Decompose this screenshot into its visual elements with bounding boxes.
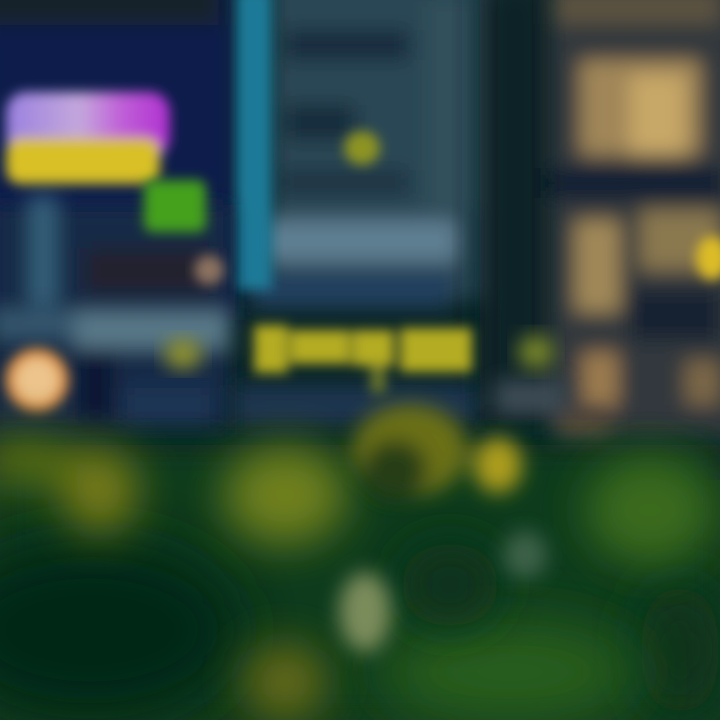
icon: teal column xyxy=(236,0,272,290)
icon: billboard yellow band xyxy=(6,138,160,184)
panel: foreground foliage xyxy=(0,445,720,720)
icon: dark bush xyxy=(400,543,500,627)
panel: lower central building xyxy=(235,380,610,442)
panel: lower left storefronts xyxy=(0,195,230,430)
panel: left night sky xyxy=(0,0,235,320)
chart: neon billboard xyxy=(6,92,170,184)
panel: right warm building xyxy=(550,0,720,440)
icon: yellow-green window on building xyxy=(344,131,380,165)
icon: billboard upper band xyxy=(6,92,170,158)
icon: small yellow light xyxy=(165,339,201,369)
icon: yellow neon lettering xyxy=(254,325,472,393)
icon: round glowing lamp xyxy=(5,348,69,412)
icon: foliage highlights xyxy=(0,435,715,720)
icon: central shrub xyxy=(352,404,522,500)
icon: pale figure xyxy=(339,531,547,652)
icon: green square sign xyxy=(144,180,206,232)
icon: small warm lamp xyxy=(194,255,224,285)
panel: central grey building xyxy=(250,0,494,308)
icon: small yellow-green marker xyxy=(518,335,554,369)
panel: dark gap between buildings xyxy=(480,0,550,420)
icon: yellow window light xyxy=(696,236,720,280)
